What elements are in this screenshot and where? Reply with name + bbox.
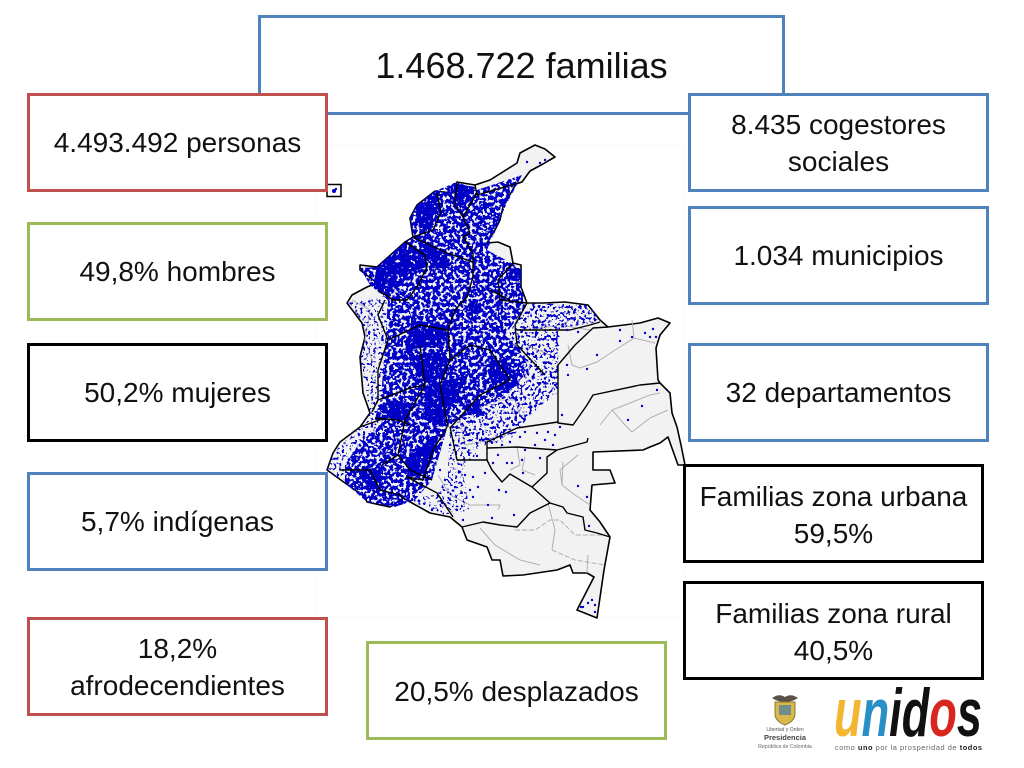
title box: total families: 1.468.722 familias xyxy=(375,44,668,86)
stat: zona rural: 40,5% xyxy=(794,634,873,666)
stat: zona urbana xyxy=(683,464,984,563)
stat: departamentos xyxy=(688,343,989,442)
logo: Presidencia coat of arms: Presidencia xyxy=(764,733,807,742)
logo: Presidencia coat of arms xyxy=(758,695,812,750)
municipal grey lines xyxy=(352,300,668,573)
stat: zona rural xyxy=(683,581,984,680)
title box: total families xyxy=(258,15,785,115)
stat: hombres xyxy=(27,222,328,321)
dot speckle: southern foothills xyxy=(410,426,488,514)
stat: indigenas: 5,7% indígenas xyxy=(81,506,274,537)
logo: Presidencia coat of arms: Libertad y Orden xyxy=(766,727,804,733)
country shape xyxy=(327,145,685,618)
stat: mujeres xyxy=(27,343,328,442)
stat: mujeres: 50,2% mujeres xyxy=(84,377,271,408)
logo: Unidos wordmark: unidos xyxy=(834,675,982,751)
faint map frame xyxy=(315,145,685,617)
logo: Unidos wordmark: como uno por la prosperidad de todos xyxy=(835,743,982,752)
scattered blue dots xyxy=(432,160,657,612)
logo: Presidencia coat of arms: República de Colombia xyxy=(758,744,812,750)
stat: afrodecendientes xyxy=(27,617,328,716)
stat: indigenas xyxy=(27,472,328,571)
department borders xyxy=(340,182,660,537)
stat: cogestores: 8.435 cogestores xyxy=(731,108,946,140)
stat: afrodecendientes: afrodecendientes xyxy=(70,670,285,700)
stat: municipios: 1.034 municipios xyxy=(733,240,944,271)
dot speckle: very high density zones xyxy=(358,183,521,490)
stat: personas xyxy=(27,93,328,192)
stat: municipios xyxy=(688,206,989,305)
stat: desplazados: 20,5% desplazados xyxy=(394,676,639,707)
dot speckle: Pacific coast xyxy=(327,296,388,480)
stat: zona urbana: 59,5% xyxy=(794,518,873,548)
stat: personas: 4.493.492 personas xyxy=(54,127,301,158)
dot speckle: eastern foothills xyxy=(450,303,599,444)
stat: afrodecendientes: 18,2% xyxy=(138,632,217,664)
dot speckle: dense Andean and Caribbean regions xyxy=(345,175,530,507)
stat: departamentos: 32 departamentos xyxy=(726,377,951,408)
stat: cogestores: sociales xyxy=(788,146,889,176)
map of Colombia with beneficiary dots xyxy=(326,144,686,619)
stat: desplazados xyxy=(366,641,667,740)
stat: zona rural: Familias zona rural xyxy=(715,598,952,628)
stat: cogestores xyxy=(688,93,989,192)
inset map: San Andres xyxy=(327,184,341,196)
stat: zona urbana: Familias zona urbana xyxy=(700,480,967,512)
stat: hombres: 49,8% hombres xyxy=(79,256,276,287)
